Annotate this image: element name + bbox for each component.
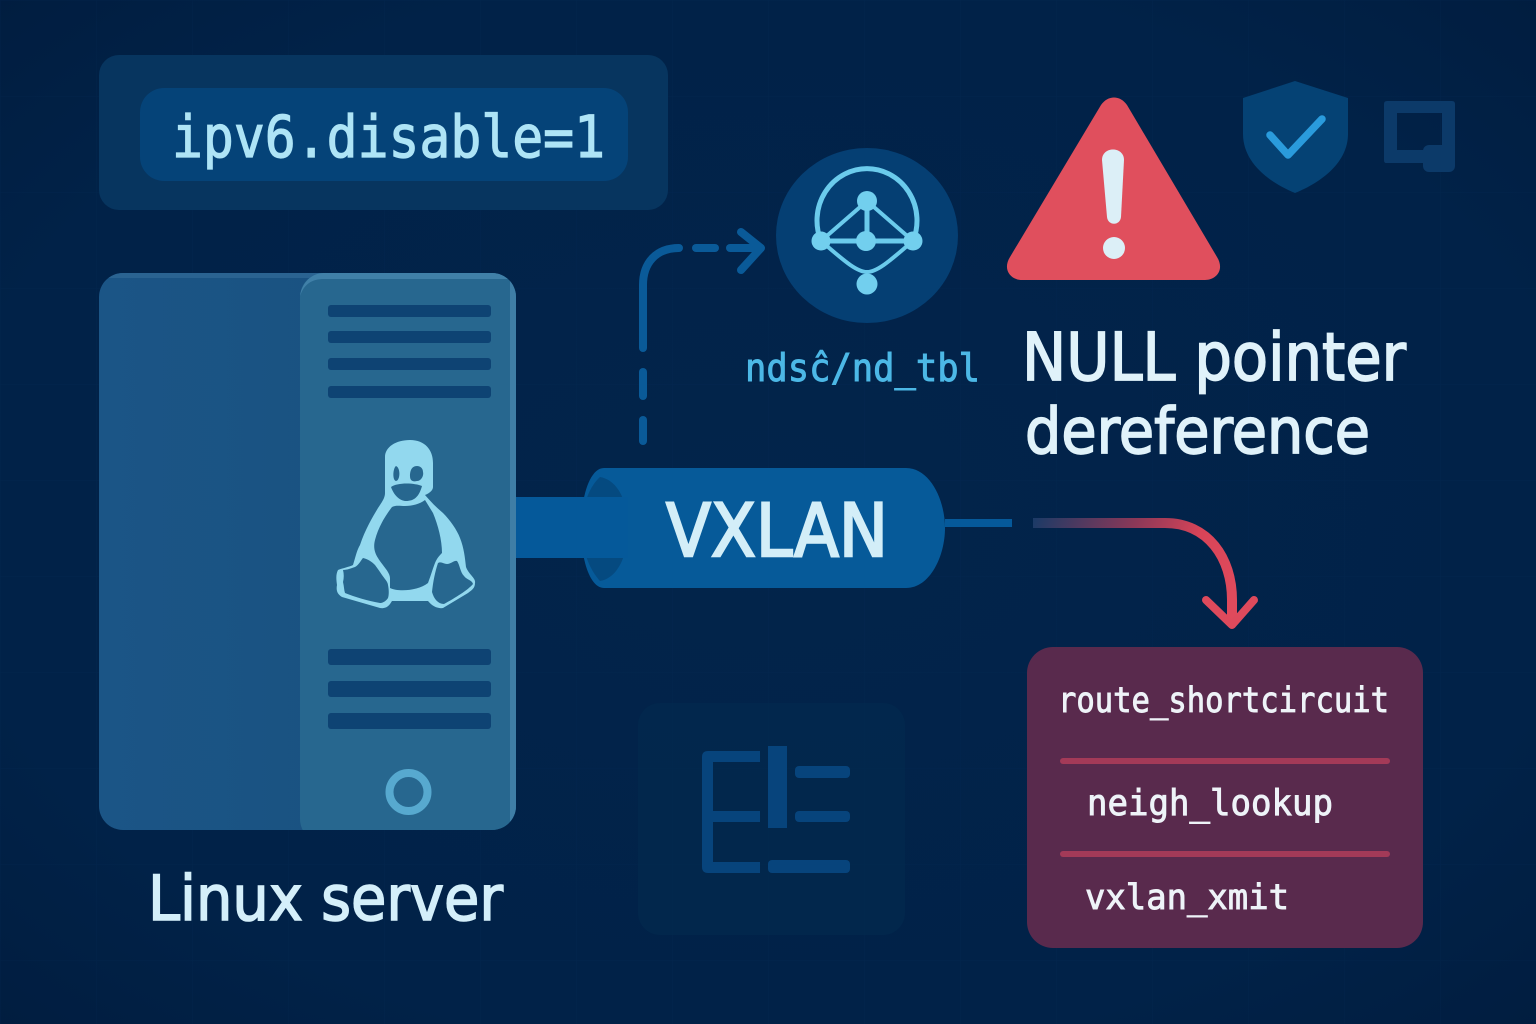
- server left body: [99, 273, 540, 843]
- text: VXLAN: VXLAN: [666, 489, 888, 574]
- icon: warning triangle: [1007, 98, 1220, 280]
- icon: faded blocks: [702, 746, 850, 873]
- stack frame: neigh_lookup: neigh_lookup: [1087, 783, 1333, 824]
- stack frame: vxlan_xmit: vxlan_xmit: [1085, 878, 1289, 918]
- arrow: dashed to neighbour table: [643, 232, 761, 441]
- label: ndsĉ/nd_tbl: ndsĉ/nd_tbl: [745, 346, 980, 391]
- icon: Linux penguin: [336, 440, 475, 608]
- VXLAN tunnel: [516, 468, 1012, 588]
- dividers: [1060, 758, 1390, 764]
- icon: shield check: [1243, 81, 1348, 193]
- panel: kernel parameter: [99, 55, 668, 210]
- icon: neighbour table network: [776, 148, 958, 323]
- panel: Linux server: [99, 273, 540, 843]
- arrow: crash path: [1033, 523, 1254, 625]
- stack frame: route_shortcircuit: route_shortcircuit: [1058, 681, 1389, 721]
- connector stub: [945, 519, 1012, 527]
- icon: square chip: [1384, 101, 1455, 172]
- heading: NULL pointer dereference: dereference: [1025, 395, 1370, 468]
- vent bars bottom: [328, 649, 491, 729]
- heading: NULL pointer dereference: [1022, 319, 1407, 468]
- tube opening: [582, 477, 628, 581]
- vent bars top: [328, 305, 491, 398]
- label: Linux server: Linux server: [148, 862, 503, 935]
- cable: [516, 497, 628, 558]
- text: ipv6.disable=1: ipv6.disable=1: [172, 103, 605, 171]
- heading: NULL pointer dereference: NULL pointer: [1022, 319, 1407, 396]
- panel: faded diagram: [638, 703, 905, 935]
- panel: call stack: [1027, 647, 1423, 948]
- power button: [390, 773, 428, 811]
- tube body: [581, 468, 945, 588]
- parameter chip: [140, 88, 628, 181]
